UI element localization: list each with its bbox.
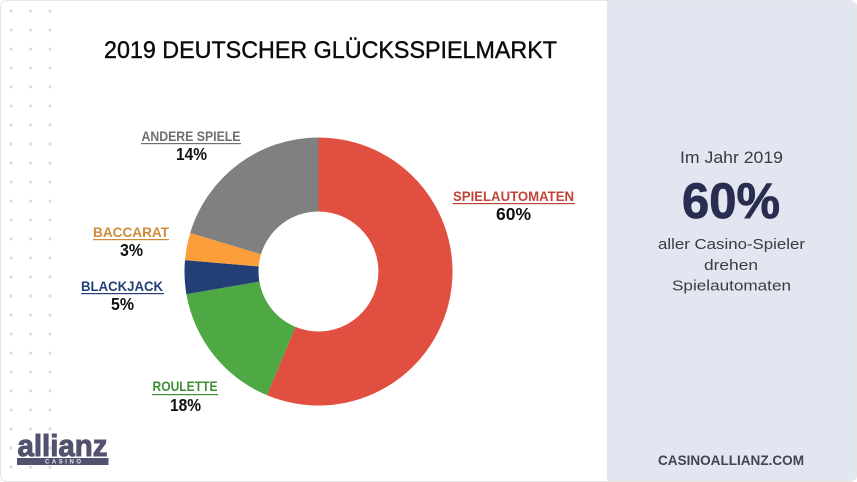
website url: CASINOALLIANZ.COM <box>658 452 804 468</box>
slice: Baccarat <box>185 233 261 266</box>
label: Blackjack: 5% <box>111 294 134 314</box>
callout: 60 percent statistic: drehen <box>704 257 758 274</box>
callout: 60 percent statistic: Im Jahr 2019 <box>680 149 783 167</box>
logo: Allianz Casino: CASINO <box>45 460 81 466</box>
label: Roulette <box>152 378 218 415</box>
label: Blackjack: BLACKJACK <box>81 278 163 294</box>
label: Andere Spiele: 14% <box>176 144 207 164</box>
label: Spielautomaten: SPIELAUTOMATEN <box>453 188 574 204</box>
label: Baccarat <box>93 224 169 260</box>
slice: Roulette <box>186 282 295 395</box>
label: Spielautomaten <box>452 188 575 224</box>
callout: 60 percent statistic: aller Casino-Spieler <box>658 236 805 253</box>
donut chart <box>185 138 453 406</box>
logo: Allianz Casino: allianz <box>18 428 108 463</box>
label: Andere Spiele <box>141 128 241 164</box>
callout: 60 percent statistic <box>658 149 805 294</box>
label: Baccarat: BACCARAT <box>93 224 169 240</box>
label: Roulette: ROULETTE <box>152 378 218 394</box>
slice: Blackjack <box>185 260 259 294</box>
label: Baccarat: 3% <box>120 240 143 260</box>
label: Roulette: 18% <box>170 395 201 415</box>
label: Spielautomaten: 60% <box>496 204 531 224</box>
slice: Andere Spiele <box>190 138 318 254</box>
slice: Spielautomaten <box>267 138 453 406</box>
callout: 60 percent statistic: 60% <box>682 173 780 229</box>
title: 2019 DEUTSCHER GLÜCKSSPIELMARKT <box>104 37 557 64</box>
label: Andere Spiele: ANDERE SPIELE <box>142 128 240 144</box>
panel: sidebar <box>607 1 856 481</box>
label: Blackjack <box>81 278 164 314</box>
callout: 60 percent statistic: Spielautomaten <box>672 278 791 294</box>
